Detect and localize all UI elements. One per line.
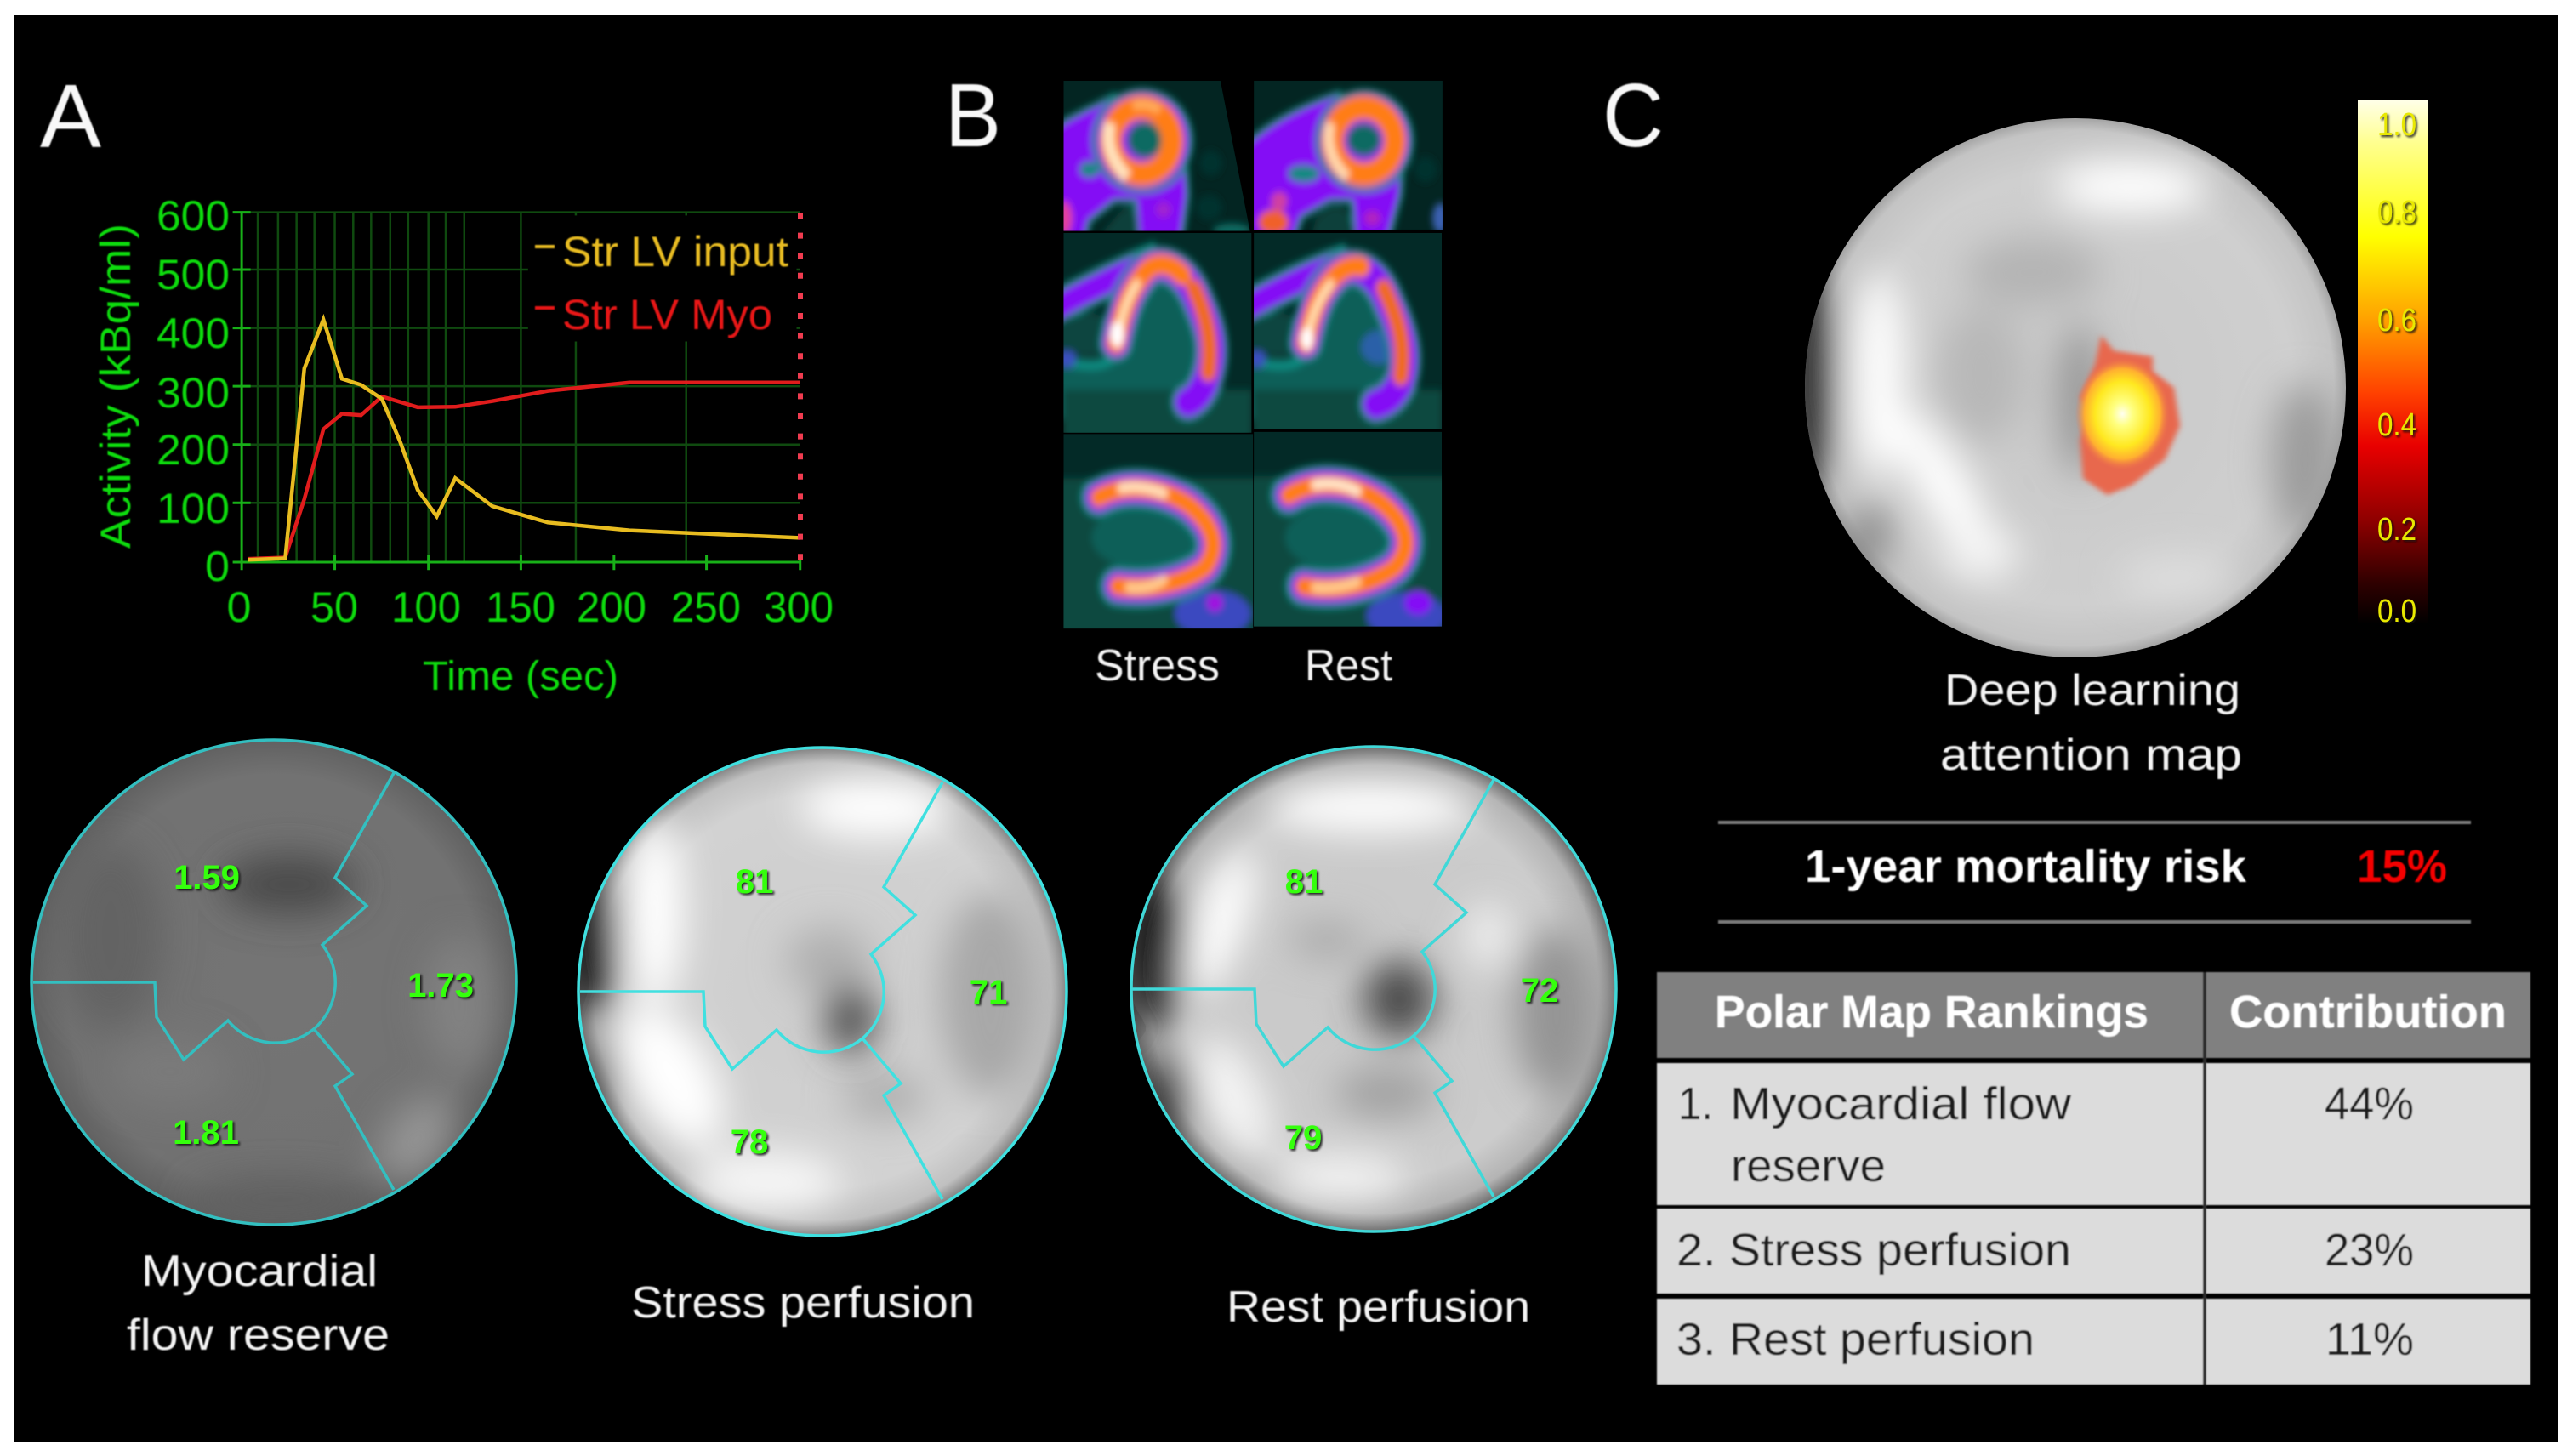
deep learning attention map (1788, 117, 2348, 659)
x-axis title: Time (sec) (423, 654, 618, 699)
caption: stress perfusion: Stress perfusion (631, 1278, 975, 1328)
y-axis tick labels: 200 (157, 426, 230, 474)
row 2 (1657, 1209, 2530, 1294)
y-axis tick labels: 400 (157, 310, 230, 357)
y-axis tick labels (157, 192, 230, 590)
segment values: 72 (1521, 972, 1558, 1010)
segment values: 1.59 (174, 859, 240, 896)
colour scale labels: 1.0 (2377, 107, 2416, 143)
mortality risk band: 1-year mortality risk (1805, 841, 2247, 892)
stress vertical long-axis slice (1063, 233, 1252, 433)
colour scale labels: 0.8 (2377, 195, 2416, 230)
caption: Stress: Stress (1095, 641, 1220, 691)
caption: myocardial flow reserve: Myocardial (141, 1247, 378, 1296)
colour scale bar (2358, 100, 2428, 629)
x-axis tick labels: 200 (577, 583, 646, 631)
line chart: activity over time (92, 192, 834, 699)
row 2: 23% (2325, 1225, 2414, 1276)
row 1: Myocardial flow (1730, 1078, 2072, 1129)
stress short-axis slice (1063, 81, 1250, 231)
row 1: 44% (2325, 1078, 2414, 1129)
colour scale labels: 0.2 (2377, 512, 2416, 548)
attention hot spot (2075, 335, 2180, 495)
segment values (173, 859, 474, 1152)
colour scale labels (2377, 107, 2416, 629)
rest vertical long-axis slice (1236, 233, 1442, 445)
x-axis tick labels: 50 (310, 583, 358, 631)
table header: Polar Map Rankings (1715, 987, 2149, 1038)
x-axis tick labels: 250 (671, 583, 741, 631)
caption: myocardial flow reserve (127, 1247, 390, 1360)
y-axis tick labels: 100 (157, 485, 230, 532)
row 1 (1657, 1063, 2530, 1205)
segment values: 1.81 (173, 1114, 239, 1152)
table header (1657, 972, 2530, 1058)
x-axis tick labels: 300 (764, 583, 834, 631)
caption: deep learning attention map: attention map (1940, 731, 2242, 780)
row 3: 11% (2325, 1314, 2414, 1365)
y-axis tick labels: 500 (157, 251, 230, 299)
legend: Str LV Myo: Str LV Myo (562, 291, 772, 338)
segment values: 81 (1285, 863, 1323, 901)
polar map: rest perfusion (1126, 745, 1618, 1233)
segment values: 81 (736, 863, 773, 901)
caption: deep learning attention map (1940, 666, 2242, 780)
mortality risk band: 15% (2357, 841, 2447, 892)
x-axis tick labels: 150 (486, 583, 555, 631)
row 3: 3. Rest perfusion (1676, 1314, 2035, 1365)
red curve: Str LV Myo (248, 383, 800, 559)
panel label B: B (945, 65, 1001, 166)
table: polar map rankings (1657, 972, 2530, 1385)
SPECT images: stress and rest slices (1063, 81, 1443, 629)
segment outlines (1131, 747, 1616, 1231)
caption: rest perfusion: Rest perfusion (1227, 1283, 1530, 1332)
x-axis tick labels: 0 (226, 583, 252, 631)
table header: Contribution (2229, 987, 2507, 1038)
row 2: 2. Stress perfusion (1676, 1225, 2071, 1276)
segment outlines (578, 748, 1067, 1236)
y-axis tick labels: 300 (157, 369, 230, 417)
row 3 (1657, 1299, 2530, 1385)
colour scale labels: 0.4 (2377, 407, 2416, 443)
x-axis tick labels: 100 (391, 583, 461, 631)
segment values: 1.73 (407, 967, 474, 1004)
caption: deep learning attention map: Deep learning (1944, 666, 2240, 715)
polar map: stress perfusion (566, 746, 1068, 1237)
rest horizontal long-axis slice (1236, 432, 1460, 646)
segment outlines (31, 740, 516, 1225)
y-axis title: Activity (kBq/ml) (92, 224, 139, 549)
x-axis tick labels (226, 583, 834, 631)
colour scale labels: 0.0 (2377, 594, 2416, 629)
caption: Rest: Rest (1305, 641, 1393, 691)
rest short-axis slice (1254, 81, 1443, 230)
legend: Str LV input: Str LV input (562, 228, 788, 276)
row 1: reserve (1731, 1140, 1886, 1192)
yellow curve: Str LV input (248, 320, 800, 560)
segment values (731, 863, 1007, 1161)
segment values (1284, 863, 1558, 1157)
stress horizontal long-axis slice (1045, 434, 1258, 647)
mortality risk band (1718, 821, 2471, 924)
panel label C: C (1602, 65, 1664, 166)
row 1: 1. (1678, 1078, 1713, 1129)
caption: myocardial flow reserve: flow reserve (127, 1311, 390, 1360)
y-axis tick labels: 600 (157, 192, 230, 240)
segment values: 71 (970, 974, 1007, 1011)
panel label A: A (40, 66, 101, 167)
y-axis tick labels: 0 (205, 543, 230, 590)
segment values: 79 (1284, 1119, 1322, 1157)
polar map: myocardial flow reserve (30, 738, 518, 1226)
colour scale labels: 0.6 (2377, 303, 2416, 338)
segment values: 78 (731, 1123, 768, 1161)
